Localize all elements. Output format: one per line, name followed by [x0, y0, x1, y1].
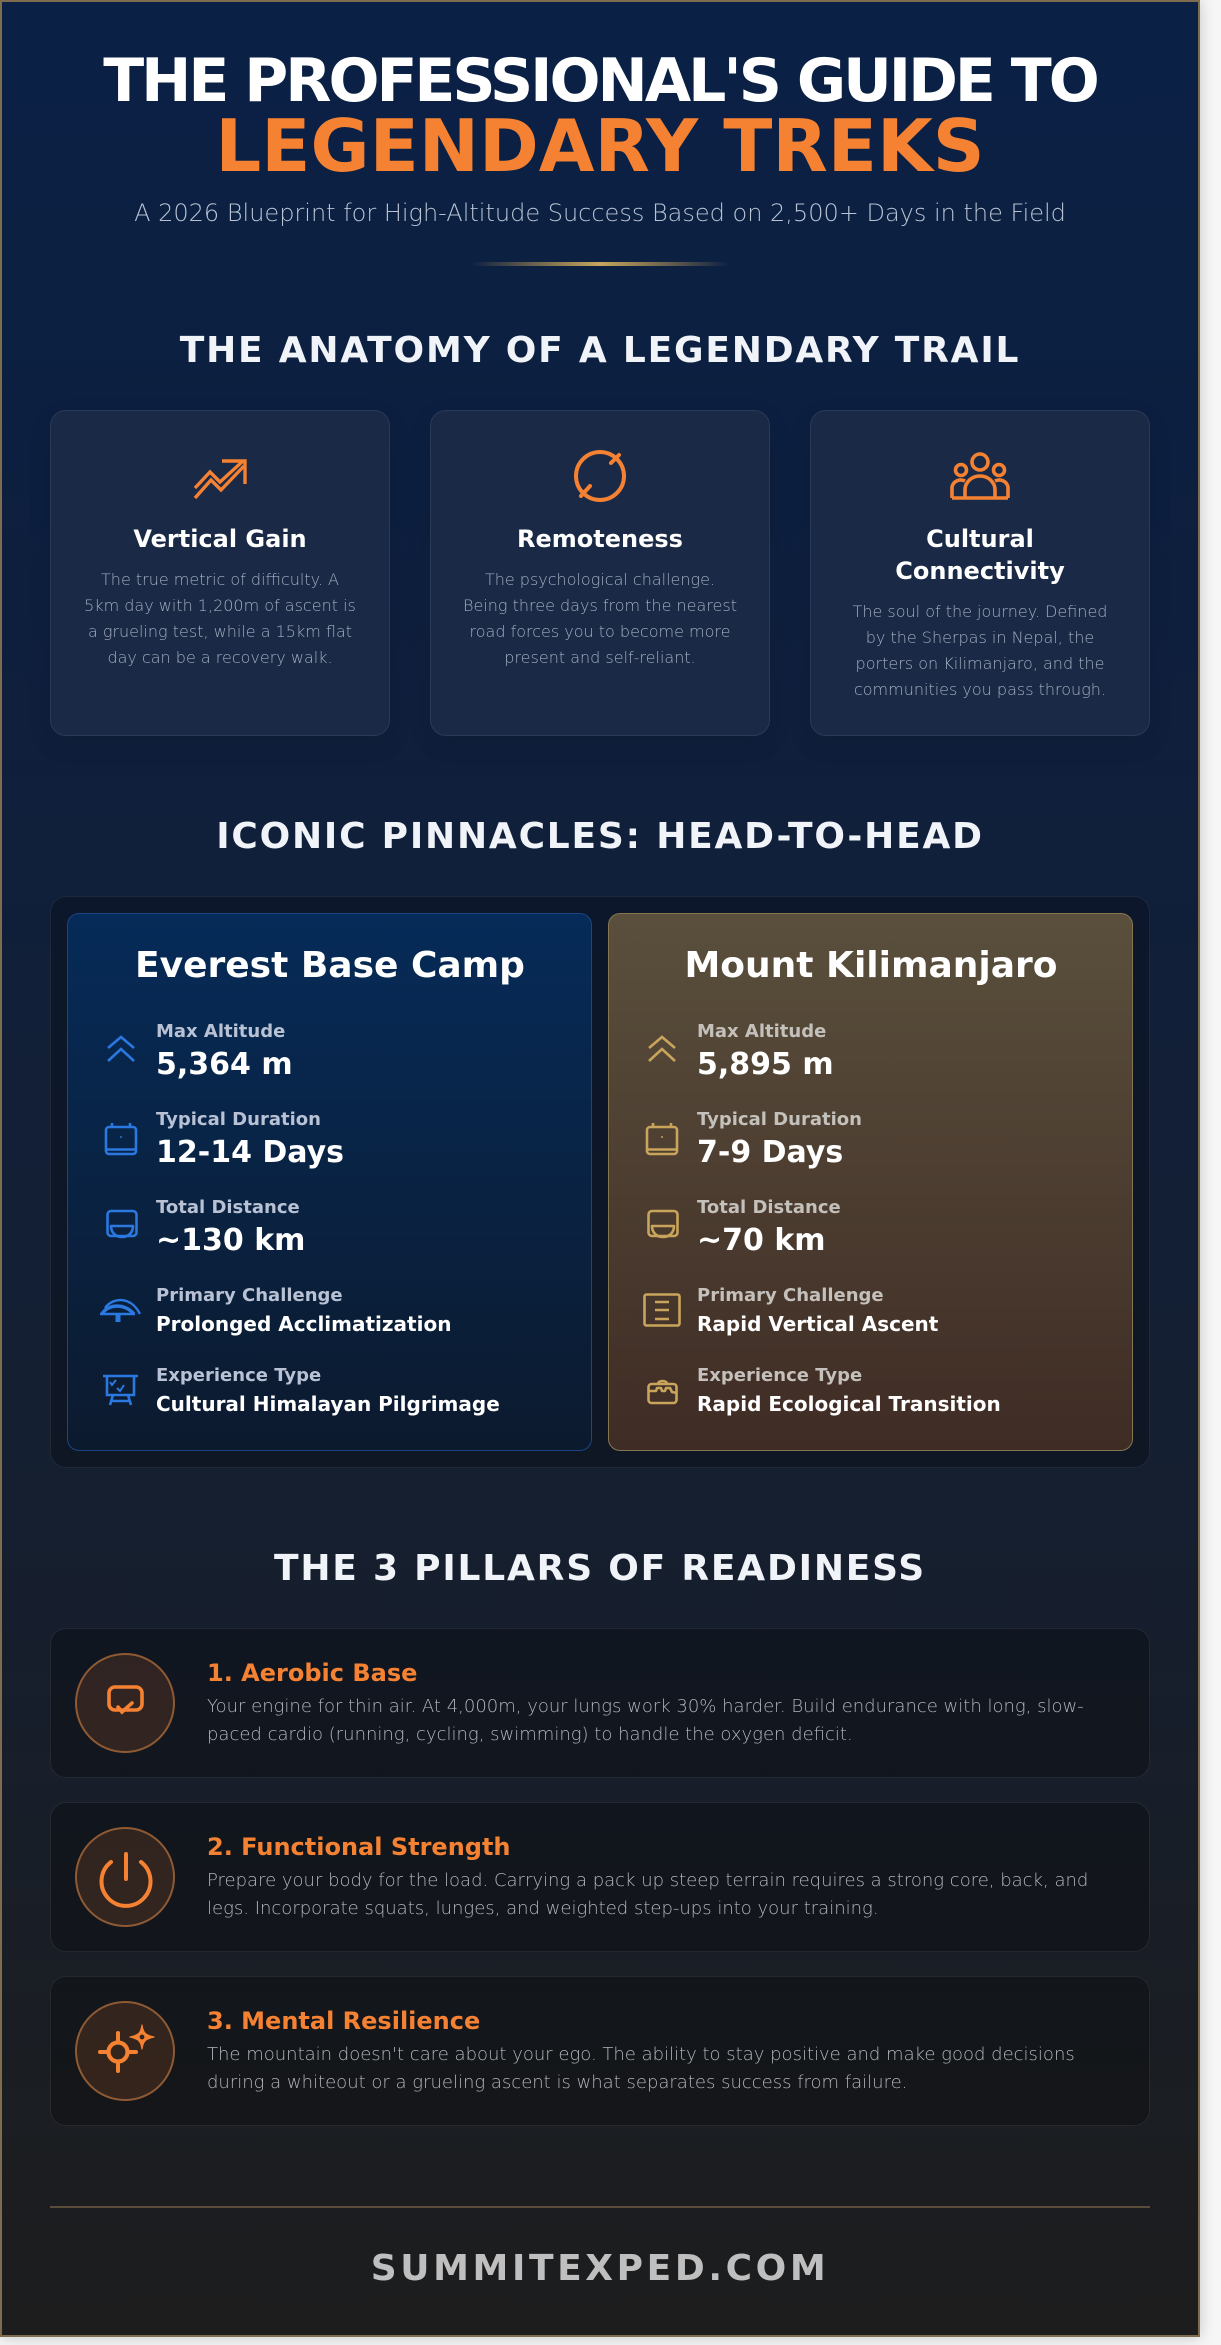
row: max altitude [107, 1021, 293, 1082]
panel: everest base camp [67, 913, 592, 1451]
pillar title: 1. Aerobic Base [207, 1659, 417, 1687]
icon: trending arrow [194, 459, 247, 500]
pillar title: 3. Mental Resilience [207, 2007, 480, 2035]
row: primary challenge [100, 1285, 451, 1336]
label: Max Altitude [697, 1021, 826, 1042]
card title [895, 525, 1065, 585]
icon: tray [647, 1210, 679, 1238]
icon: aerobic badge [75, 1653, 175, 1753]
row: max altitude [648, 1021, 834, 1082]
value: 7-9 Days [697, 1135, 843, 1170]
value: 5,895 m [697, 1047, 834, 1082]
pillar text: legs. Incorporate squats, lunges, and weighted step-ups into your training. [207, 1898, 879, 1919]
row: experience type [647, 1365, 1001, 1416]
card text: The psychological challenge. [485, 570, 715, 589]
row: total distance [647, 1197, 841, 1258]
card text [852, 602, 1107, 699]
icon: chevrons [648, 1035, 676, 1062]
pillar text: The mountain doesn't care about your ego. The ability to stay positive and make good decisions [207, 2044, 1075, 2065]
value: ~130 km [156, 1223, 305, 1258]
icon: group of people [950, 452, 1010, 500]
value: 5,364 m [156, 1047, 293, 1082]
value: Cultural Himalayan Pilgrimage [156, 1392, 500, 1416]
value: Rapid Ecological Transition [697, 1392, 1001, 1416]
icon: calendar [646, 1123, 678, 1156]
title line 2: LEGENDARY TREKS [215, 104, 985, 188]
card text: day can be a recovery walk. [107, 648, 333, 667]
label: Total Distance [697, 1197, 841, 1218]
icon: calendar [104, 1123, 138, 1156]
panel: vertical gain [50, 410, 390, 736]
icon: briefcase [647, 1380, 678, 1404]
label: Experience Type [156, 1365, 321, 1386]
card title: Cultural [926, 525, 1034, 553]
card text: 5km day with 1,200m of ascent is [84, 596, 356, 615]
gold divider [470, 262, 730, 266]
label: Primary Challenge [697, 1285, 884, 1306]
card text [463, 570, 737, 667]
icon: easel [103, 1374, 138, 1406]
card text: The true metric of difficulty. A [101, 570, 339, 589]
label: Typical Duration [156, 1109, 321, 1130]
value: Rapid Vertical Ascent [697, 1312, 938, 1336]
icon: tray [106, 1210, 138, 1238]
pillar text [207, 1696, 1084, 1745]
card text [84, 570, 356, 667]
footer rule [50, 2206, 1150, 2208]
panel: functional strength [50, 1802, 1150, 1952]
panel: mental resilience [50, 1976, 1150, 2126]
row: primary challenge [643, 1285, 938, 1336]
card text: communities you pass through. [854, 680, 1106, 699]
card text: Being three days from the nearest [463, 596, 737, 615]
kilimanjaro heading: Mount Kilimanjaro [684, 945, 1058, 986]
icon: chevrons [107, 1035, 135, 1062]
value: Prolonged Acclimatization [156, 1312, 451, 1336]
value: ~70 km [697, 1223, 826, 1258]
card text: a grueling test, while a 15km flat [88, 622, 352, 641]
card title: Connectivity [895, 557, 1065, 585]
section heading: pillars: THE 3 PILLARS OF READINESS [274, 1548, 926, 1589]
label: Typical Duration [697, 1109, 862, 1130]
panel: remoteness [430, 410, 770, 736]
panel: cultural connectivity [810, 410, 1150, 736]
row: typical duration [104, 1109, 344, 1170]
row: experience type [103, 1365, 500, 1416]
icon: compass circle [574, 450, 626, 502]
pillar text: paced cardio (running, cycling, swimming) to handle the oxygen deficit. [207, 1724, 853, 1745]
row: typical duration [646, 1109, 862, 1170]
panel: mount kilimanjaro [608, 913, 1133, 1451]
panel: aerobic base [50, 1628, 1150, 1778]
pillar text [207, 1870, 1088, 1919]
label: Primary Challenge [156, 1285, 343, 1306]
title line 1: THE PROFESSIONAL'S GUIDE TO [103, 46, 1097, 116]
pillar text: Your engine for thin air. At 4,000m, your lungs work 30% harder. Build endurance with long, slow- [207, 1696, 1084, 1717]
card text: porters on Kilimanjaro, and the [856, 654, 1104, 673]
pillar text [207, 2044, 1075, 2093]
icon: list box [643, 1293, 681, 1327]
card title: Vertical Gain [133, 525, 307, 553]
section heading: pinnacles: ICONIC PINNACLES: HEAD-TO-HEAD [216, 816, 984, 857]
label: Total Distance [156, 1197, 300, 1218]
value: 12-14 Days [156, 1135, 344, 1170]
card text: by the Sherpas in Nepal, the [866, 628, 1094, 647]
icon: sparkle badge [75, 2001, 175, 2101]
subtitle: A 2026 Blueprint for High-Altitude Success Based on 2,500+ Days in the Field [134, 199, 1066, 227]
card text: The soul of the journey. Defined [853, 602, 1107, 621]
pillar title: 2. Functional Strength [207, 1833, 511, 1861]
everest heading: Everest Base Camp [135, 945, 525, 986]
footer brand: SUMMITEXPED.COM [371, 2248, 829, 2288]
card text: road forces you to become more [470, 622, 730, 641]
pillar text: during a whiteout or a grueling ascent is what separates success from failure. [207, 2072, 907, 2093]
header [103, 46, 1097, 266]
row: total distance [106, 1197, 305, 1258]
card text: present and self-reliant. [504, 648, 696, 667]
icon: umbrella [100, 1298, 141, 1322]
pillar text: Prepare your body for the load. Carrying a pack up steep terrain requires a strong core, back, and [207, 1870, 1088, 1891]
icon: power badge [75, 1827, 175, 1927]
section heading: anatomy: THE ANATOMY OF A LEGENDARY TRAIL [180, 330, 1020, 371]
label: Experience Type [697, 1365, 862, 1386]
panel: comparison [50, 896, 1150, 1468]
label: Max Altitude [156, 1021, 285, 1042]
card title: Remoteness [517, 525, 683, 553]
